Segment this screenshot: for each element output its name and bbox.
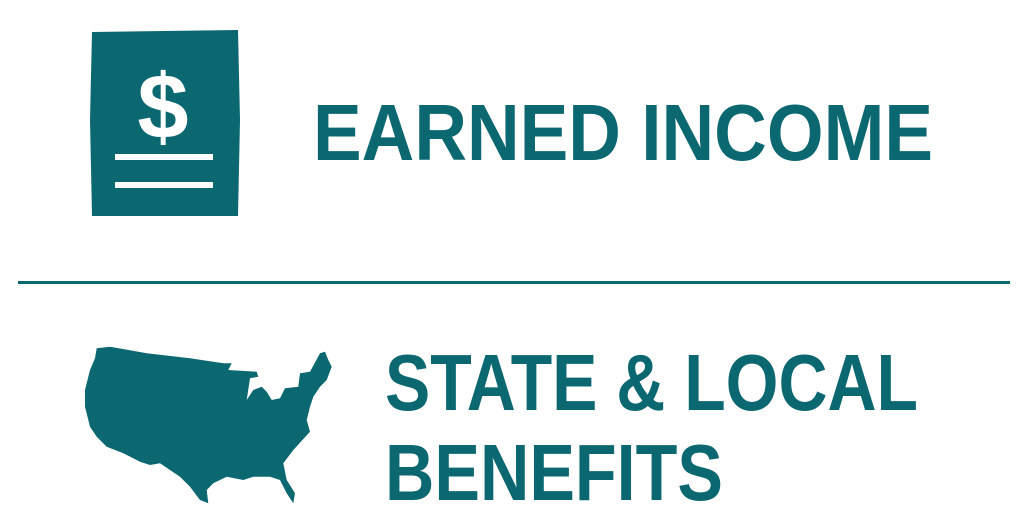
icon: paycheck document: [90, 30, 240, 216]
icon: US map: [85, 347, 332, 503]
heading: state & local benefits: STATE & LOCAL: [385, 338, 918, 427]
heading: state & local benefits: BENEFITS: [385, 428, 723, 517]
icon: paycheck document: $: [137, 56, 189, 158]
heading: earned income: EARNED INCOME: [313, 88, 933, 177]
heading: state & local benefits: [385, 338, 918, 517]
